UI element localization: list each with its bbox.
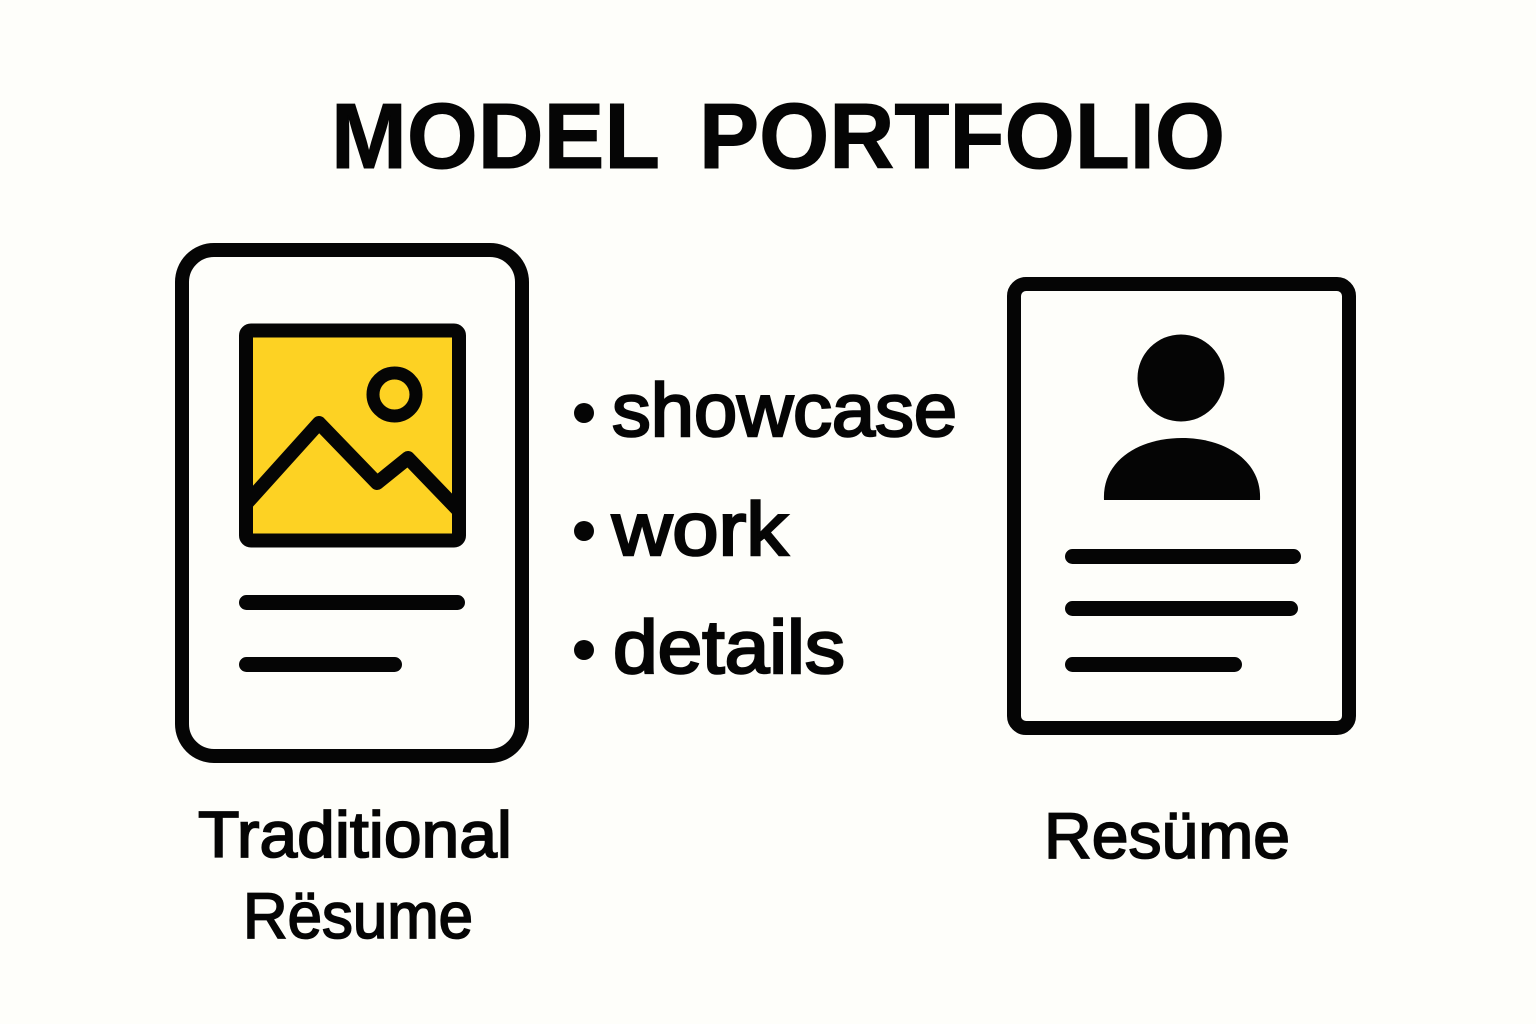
caption: resume: Resüme: [1044, 799, 1290, 872]
panel: resume card: [1014, 284, 1349, 728]
icon: sun: [373, 373, 416, 416]
icon: image placeholder: [245, 330, 460, 540]
bullet: work: work: [611, 487, 789, 571]
caption: traditional resume: Traditional: [198, 798, 512, 871]
title: [331, 84, 1225, 188]
text line 3: [1065, 657, 1242, 672]
bullet: details: details: [613, 605, 845, 689]
caption: traditional resume: [198, 798, 512, 952]
icon: person head: [1138, 334, 1224, 422]
icon: person shoulders: [1104, 438, 1260, 500]
bullet: showcase: showcase: [612, 368, 957, 452]
text line 2: [239, 657, 402, 672]
title: MODEL: [331, 84, 660, 188]
text line 1: [1065, 549, 1301, 564]
bullet list: [574, 368, 957, 689]
image frame: [246, 330, 459, 540]
icon: mountains: [245, 423, 460, 512]
text line 1: [239, 595, 465, 610]
title: PORTFOLIO: [699, 84, 1225, 188]
panel: traditional resume card: [182, 250, 522, 756]
text line 2: [1065, 601, 1298, 616]
caption: traditional resume: Rësume: [243, 879, 473, 952]
